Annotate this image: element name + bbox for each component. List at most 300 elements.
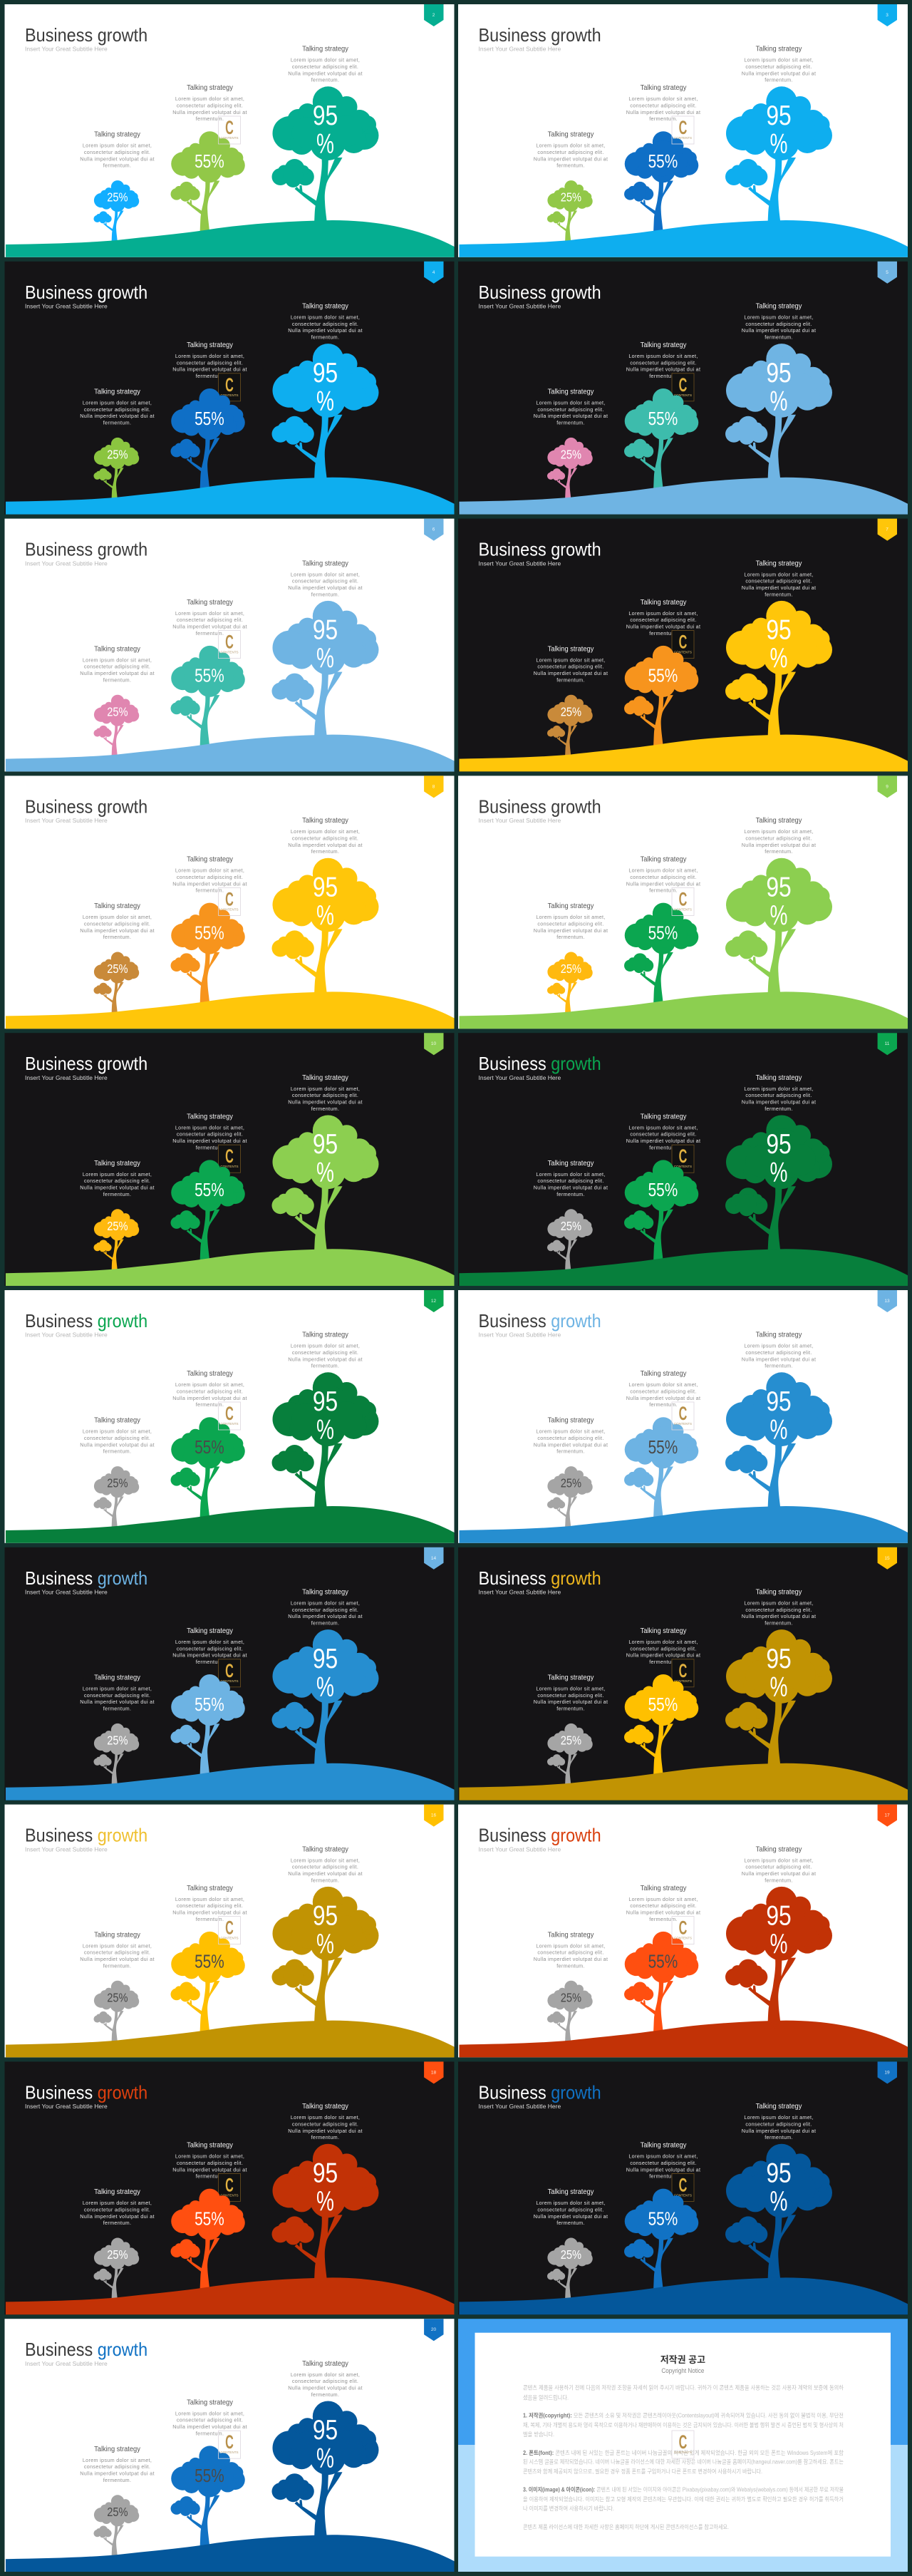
title: Business growth (479, 283, 601, 303)
text block: 55: Lorem ipsum dolor sit amet, (175, 2410, 244, 2416)
panel background (4, 519, 455, 771)
value 25: 25% (561, 962, 581, 976)
watermark: C (225, 2431, 234, 2453)
text block: 55: Talking strategy (187, 1884, 233, 1892)
panel background (4, 262, 455, 515)
value 55: 55% (648, 922, 678, 943)
text block: 95 (742, 1073, 816, 1112)
watermark: C (225, 888, 234, 910)
text block: 95: Talking strategy (302, 560, 348, 567)
text block: 55 (172, 84, 247, 122)
text block: 95: fermentum. (311, 1877, 339, 1883)
subtitle: Insert Your Great Subtitle Here (25, 1845, 108, 1853)
text block: 55: fermentum. (196, 2430, 224, 2436)
text block: 95: Talking strategy (756, 302, 802, 311)
value 55: 55% (648, 1694, 678, 1714)
watermark (218, 1145, 241, 1173)
value 95: % (770, 2186, 787, 2217)
watermark (672, 2431, 694, 2458)
text block: 25: Lorem ipsum dolor sit amet, (83, 2200, 152, 2206)
page badge: 20 (431, 2327, 436, 2332)
text block: 95: Lorem ipsum dolor sit amet, (291, 314, 360, 320)
text block: 55 (172, 341, 247, 379)
watermark: CONTENTS (674, 651, 692, 654)
text block: 25: fermentum. (103, 1962, 131, 1969)
watermark: CONTENTS (220, 2451, 239, 2454)
text block: 55 (626, 1884, 700, 1922)
text block: 95 (742, 560, 816, 597)
text block: 55: Talking strategy (641, 341, 686, 349)
page badge (424, 2061, 443, 2083)
text block: 95: Lorem ipsum dolor sit amet, (744, 1600, 814, 1607)
value 55: 55% (195, 922, 224, 943)
text block: 95: consectetur adipiscing elit. (292, 1349, 358, 1356)
value 95 (766, 1900, 792, 1960)
watermark: C (679, 1145, 687, 1167)
value 55: 55% (195, 2208, 224, 2229)
small tree (93, 952, 139, 1014)
page badge: 11 (885, 1041, 890, 1046)
text block: 55 (626, 1370, 700, 1408)
text block: 25: Nulla imperdiet volutpat dui at (534, 155, 608, 162)
text block: 95: Lorem ipsum dolor sit amet, (744, 571, 814, 577)
text block: 25: Talking strategy (94, 130, 140, 139)
panel background (458, 2061, 908, 2314)
text block: 55: Lorem ipsum dolor sit amet, (175, 1124, 244, 1130)
text block: 95: fermentum. (311, 1620, 339, 1627)
value 25: 25% (561, 1733, 581, 1748)
large tree (272, 1629, 379, 1777)
text block: 25: Nulla imperdiet volutpat dui at (80, 927, 155, 934)
medium tree (624, 903, 698, 1005)
text block: 55 (626, 1113, 700, 1150)
text block: 55: Nulla imperdiet volutpat dui at (626, 366, 700, 373)
panel background (4, 1290, 455, 1543)
value 95 (766, 2157, 792, 2217)
text block: 55 (626, 341, 700, 379)
text block: 25: fermentum. (556, 934, 585, 940)
value 25: 25% (561, 705, 581, 719)
text block: 55: Lorem ipsum dolor sit amet, (175, 353, 244, 359)
text block: 55: Lorem ipsum dolor sit amet, (175, 1381, 244, 1388)
text block: 95 (288, 45, 363, 83)
text block: 55: Talking strategy (187, 1627, 233, 1635)
text block: 95: consectetur adipiscing elit. (745, 578, 812, 584)
watermark: CONTENTS (674, 1937, 692, 1940)
text block: 55: Lorem ipsum dolor sit amet, (175, 610, 244, 617)
upper blue band (458, 2319, 908, 2445)
hill (459, 1249, 908, 1286)
watermark (218, 1917, 241, 1944)
watermark: C (225, 2174, 234, 2195)
watermark: C (679, 117, 687, 138)
hill (459, 2021, 908, 2057)
watermark (672, 1145, 694, 1173)
text block: 95: Talking strategy (756, 1588, 802, 1597)
text block: 55 (172, 1113, 247, 1150)
watermark (218, 2173, 241, 2201)
value 95: % (770, 1929, 787, 1960)
text block: 95: Nulla imperdiet volutpat dui at (288, 1870, 363, 1877)
page badge: 7 (886, 527, 888, 532)
title: Business growth (479, 2083, 601, 2103)
white notice card (475, 2333, 891, 2557)
text block: 95: Nulla imperdiet volutpat dui at (742, 584, 816, 591)
panel background (458, 1805, 908, 2057)
subtitle: Insert Your Great Subtitle Here (25, 560, 108, 567)
small tree (93, 2495, 139, 2557)
text block: 25 (534, 645, 608, 683)
large tree (272, 1372, 379, 1520)
value 55: 55% (648, 666, 678, 686)
value 55: 55% (195, 666, 224, 686)
copyright notice slide (458, 2319, 908, 2572)
notice body text: 나 이미지를 변경하여 사용하시기 바랍니다. (523, 2505, 614, 2512)
subtitle: Insert Your Great Subtitle Here (479, 1074, 561, 1081)
notice body text: 콘텐츠 제품을 사용하기 전에 다음의 저작권 조항을 자세히 읽어 주시기 바랍니다. 귀하가 이 콘텐츠 제품을 사용하는 것은 사용자 계약의 보증에 동의하 (523, 2384, 844, 2391)
page badge: 15 (884, 1556, 890, 1561)
text block: 95: consectetur adipiscing elit. (745, 321, 812, 327)
text block: 55: consectetur adipiscing elit. (177, 359, 243, 366)
value 95: % (316, 129, 334, 160)
watermark (218, 116, 241, 144)
notice subheading: Copyright Notice (661, 2367, 704, 2374)
text block: 25: Talking strategy (94, 1159, 140, 1168)
subtitle: Insert Your Great Subtitle Here (479, 1845, 561, 1853)
text block: 95: fermentum. (765, 77, 793, 83)
text block: 25: fermentum. (103, 2477, 131, 2483)
text block: 95: Talking strategy (756, 1845, 802, 1853)
slide 12 (4, 1290, 455, 1543)
value 95 (313, 100, 338, 160)
page badge (878, 1290, 897, 1312)
text block: 25: fermentum. (556, 2220, 585, 2226)
text block: 55: Talking strategy (187, 1370, 233, 1378)
text block: 55: fermentum. (649, 1916, 678, 1922)
text block: 25: consectetur adipiscing elit. (537, 1692, 604, 1699)
slide 7 (458, 519, 908, 771)
hill (6, 2021, 455, 2057)
watermark: C (225, 1403, 234, 1424)
text block: 95: Nulla imperdiet volutpat dui at (742, 842, 816, 848)
text block: 55: Talking strategy (187, 598, 233, 607)
text block: 55: Talking strategy (641, 1884, 686, 1892)
text block: 25: Talking strategy (94, 2188, 140, 2196)
text block: 25: consectetur adipiscing elit. (84, 1435, 150, 1441)
text block: 25: Nulla imperdiet volutpat dui at (80, 1956, 155, 1962)
value 55: 55% (648, 408, 678, 428)
page badge: 17 (884, 1813, 890, 1818)
value 95: 95 (766, 1900, 792, 1931)
value 95: % (316, 1929, 334, 1960)
panel background (4, 1033, 455, 1286)
text block: 55: Lorem ipsum dolor sit amet, (175, 96, 244, 102)
value 95 (766, 100, 792, 160)
large tree (272, 2144, 379, 2291)
text block: 55: consectetur adipiscing elit. (177, 1131, 243, 1138)
text block: 25 (80, 1931, 155, 1969)
text block: 25: Lorem ipsum dolor sit amet, (536, 2200, 606, 2206)
page badge (424, 1547, 443, 1570)
subtitle: Insert Your Great Subtitle Here (479, 46, 561, 53)
text block: 55: Lorem ipsum dolor sit amet, (175, 1639, 244, 1645)
notice heading: 저작권 공고 (660, 2354, 705, 2365)
small tree (547, 2238, 593, 2300)
text block: 95 (742, 302, 816, 341)
text block: 95: Talking strategy (756, 45, 802, 53)
text block: 25: consectetur adipiscing elit. (84, 406, 150, 413)
slide 14 (4, 1547, 455, 1800)
text block: 95: fermentum. (311, 77, 339, 83)
hill (6, 220, 455, 257)
text block: 95: consectetur adipiscing elit. (745, 835, 812, 841)
text block: 95: Nulla imperdiet volutpat dui at (288, 2128, 363, 2134)
subtitle: Insert Your Great Subtitle Here (479, 2103, 561, 2110)
value 95: 95 (766, 357, 792, 388)
text block: 25: Talking strategy (94, 2445, 140, 2453)
text block: 25: Lorem ipsum dolor sit amet, (83, 914, 152, 920)
hill (459, 1763, 908, 1800)
text block: 55: Lorem ipsum dolor sit amet, (628, 353, 698, 359)
text block: 55: Talking strategy (641, 1113, 686, 1121)
watermark: CONTENTS (220, 1679, 239, 1683)
text block: 25: Nulla imperdiet volutpat dui at (80, 1185, 155, 1191)
medium tree (171, 388, 245, 491)
text block: 95: consectetur adipiscing elit. (292, 2121, 358, 2127)
text block: 95: Talking strategy (302, 2103, 348, 2111)
value 25: 25% (107, 1733, 128, 1748)
value 25: 25% (561, 1991, 581, 2005)
hill (6, 1249, 455, 1286)
text block: 25: Lorem ipsum dolor sit amet, (83, 1942, 152, 1949)
text block: 55: Talking strategy (641, 1627, 686, 1635)
text block: 95: fermentum. (765, 2134, 793, 2140)
text block: 55: Talking strategy (641, 2141, 686, 2150)
text block: 55: Nulla imperdiet volutpat dui at (626, 880, 700, 887)
watermark: CONTENTS (220, 393, 239, 397)
text block: 55: consectetur adipiscing elit. (630, 1389, 697, 1395)
text block: 55: Nulla imperdiet volutpat dui at (172, 2166, 247, 2173)
text block: 25: Lorem ipsum dolor sit amet, (83, 143, 152, 149)
value 95 (766, 357, 792, 417)
text block: 55: fermentum. (649, 373, 678, 379)
text block: 25: Talking strategy (94, 388, 140, 396)
text block: 95 (288, 560, 363, 597)
text block: 95 (742, 1331, 816, 1369)
page badge: 5 (886, 270, 888, 275)
watermark: C (679, 1917, 687, 1939)
page badge: 8 (432, 784, 435, 789)
title: Business growth (25, 540, 147, 560)
slide 3 (458, 4, 908, 257)
text block: 55: consectetur adipiscing elit. (630, 617, 697, 623)
watermark (672, 1402, 694, 1430)
hill (459, 991, 908, 1029)
watermark: CONTENTS (220, 1422, 239, 1426)
title: Business growth (25, 1569, 147, 1589)
text block: 55: Nulla imperdiet volutpat dui at (626, 1138, 700, 1144)
medium tree (171, 2189, 245, 2291)
text block: 95 (288, 1073, 363, 1112)
text block: 55: Nulla imperdiet volutpat dui at (172, 1652, 247, 1659)
text block: 95: fermentum. (765, 848, 793, 855)
watermark: CONTENTS (674, 136, 692, 140)
value 95: 95 (313, 2157, 338, 2188)
value 95 (766, 1128, 792, 1188)
panel background (4, 776, 455, 1029)
text block: 55: fermentum. (196, 1659, 224, 1665)
text block: 55: Lorem ipsum dolor sit amet, (628, 96, 698, 102)
medium tree (624, 1417, 698, 1520)
watermark (672, 373, 694, 401)
text block: 55: Nulla imperdiet volutpat dui at (172, 1910, 247, 1916)
subtitle: Insert Your Great Subtitle Here (479, 560, 561, 567)
text block: 55: fermentum. (649, 1144, 678, 1150)
text block: 95: Lorem ipsum dolor sit amet, (744, 57, 814, 63)
value 95: 95 (766, 1643, 792, 1674)
page badge (424, 1805, 443, 1827)
value 55: 55% (195, 2466, 224, 2486)
large tree (272, 858, 379, 1005)
medium tree (171, 2446, 245, 2548)
text block: 55: consectetur adipiscing elit. (630, 874, 697, 880)
text block: 25: Talking strategy (548, 1674, 594, 1682)
value 25: 25% (561, 448, 581, 462)
hill (459, 2277, 908, 2314)
value 95 (313, 614, 338, 674)
watermark: CONTENTS (674, 393, 692, 397)
watermark: C (679, 1403, 687, 1424)
subtitle: Insert Your Great Subtitle Here (25, 302, 108, 309)
panel background (4, 4, 455, 257)
small tree (547, 1981, 593, 2044)
large tree (272, 86, 379, 234)
text block: 55: Talking strategy (187, 84, 233, 92)
text block: 55: consectetur adipiscing elit. (630, 1902, 697, 1909)
watermark: CONTENTS (220, 136, 239, 140)
large tree (725, 1115, 832, 1262)
hill (6, 991, 455, 1029)
page badge: 18 (431, 2070, 436, 2075)
text block: 25 (534, 1159, 608, 1197)
watermark: CONTENTS (220, 907, 239, 911)
text block: 25: Lorem ipsum dolor sit amet, (536, 143, 606, 149)
large tree (272, 344, 379, 491)
text block: 95: consectetur adipiscing elit. (745, 1864, 812, 1870)
text block: 55 (626, 2141, 700, 2180)
page badge: 10 (431, 1041, 436, 1046)
text block: 55: fermentum. (196, 1144, 224, 1150)
watermark: C (225, 1917, 234, 1939)
watermark (672, 631, 694, 659)
watermark (672, 1917, 694, 1944)
text block: 95: Talking strategy (302, 1845, 348, 1853)
text block: 25: consectetur adipiscing elit. (537, 149, 604, 155)
large tree (725, 1372, 832, 1520)
page badge: 2 (432, 13, 435, 18)
value 95 (313, 1900, 338, 1960)
text block: 95: Lorem ipsum dolor sit amet, (291, 1857, 360, 1863)
text block: 95 (742, 817, 816, 855)
subtitle: Insert Your Great Subtitle Here (25, 46, 108, 53)
text block: 55: Nulla imperdiet volutpat dui at (626, 2166, 700, 2173)
value 25: 25% (107, 190, 128, 205)
text block: 95: Talking strategy (756, 2103, 802, 2111)
value 95: 95 (766, 100, 792, 131)
page badge (878, 262, 897, 284)
text block: 95: consectetur adipiscing elit. (292, 1864, 358, 1870)
value 55: 55% (648, 151, 678, 171)
slide 20 (4, 2319, 455, 2572)
text block: 95: fermentum. (311, 2134, 339, 2140)
text block: 55: Talking strategy (187, 2399, 233, 2407)
text block: 55: Nulla imperdiet volutpat dui at (626, 1652, 700, 1659)
text block: 55: Talking strategy (641, 598, 686, 607)
text block: 25: consectetur adipiscing elit. (537, 1178, 604, 1184)
value 25: 25% (561, 190, 581, 205)
text block: 25: fermentum. (103, 163, 131, 169)
text block: 95 (288, 817, 363, 855)
value 95: 95 (766, 2157, 792, 2188)
large tree (272, 1115, 379, 1262)
hill (459, 478, 908, 515)
page badge: 9 (886, 784, 888, 789)
watermark: CONTENTS (674, 2451, 692, 2454)
slide 16 (4, 1805, 455, 2057)
text block: 95: Lorem ipsum dolor sit amet, (744, 828, 814, 835)
text block: 95 (288, 2103, 363, 2140)
small tree (547, 180, 593, 243)
text block: 25: Nulla imperdiet volutpat dui at (80, 670, 155, 676)
text block: 25: Lorem ipsum dolor sit amet, (83, 656, 152, 663)
text block: 25: Lorem ipsum dolor sit amet, (536, 1942, 606, 1949)
hill (6, 735, 455, 771)
value 95: 95 (313, 1128, 338, 1160)
text block: 95: Lorem ipsum dolor sit amet, (291, 2114, 360, 2121)
text block: 25: Nulla imperdiet volutpat dui at (534, 1185, 608, 1191)
text block: 25: consectetur adipiscing elit. (537, 1949, 604, 1956)
title: Business growth (25, 26, 147, 46)
text block: 55 (172, 855, 247, 894)
text block: 55 (172, 1884, 247, 1922)
value 95: % (770, 1158, 787, 1188)
text block: 55: consectetur adipiscing elit. (177, 617, 243, 623)
hill (6, 2277, 455, 2314)
text block: 25: consectetur adipiscing elit. (537, 664, 604, 670)
text block: 95: consectetur adipiscing elit. (745, 1607, 812, 1613)
text block: 25: Nulla imperdiet volutpat dui at (534, 413, 608, 419)
page badge: 12 (431, 1299, 436, 1304)
medium tree (171, 1417, 245, 1520)
text block: 25: Lorem ipsum dolor sit amet, (536, 1428, 606, 1435)
slide 17 (458, 1805, 908, 2057)
subtitle: Insert Your Great Subtitle Here (479, 302, 561, 309)
watermark: C (679, 888, 687, 910)
value 95: 95 (313, 100, 338, 131)
text block: 25: consectetur adipiscing elit. (537, 406, 604, 413)
page badge: 4 (432, 270, 435, 275)
watermark: C (225, 631, 234, 653)
text block: 95: Nulla imperdiet volutpat dui at (742, 1099, 816, 1106)
text block: 55 (626, 855, 700, 894)
text block: 25: Nulla imperdiet volutpat dui at (534, 2213, 608, 2220)
text block: 95: Nulla imperdiet volutpat dui at (742, 70, 816, 76)
text block: 55: consectetur adipiscing elit. (630, 1131, 697, 1138)
text block: 55: consectetur adipiscing elit. (177, 103, 243, 109)
text block: 55: Talking strategy (641, 1370, 686, 1378)
text block: 95: consectetur adipiscing elit. (292, 63, 358, 70)
text block: 25 (80, 1159, 155, 1197)
